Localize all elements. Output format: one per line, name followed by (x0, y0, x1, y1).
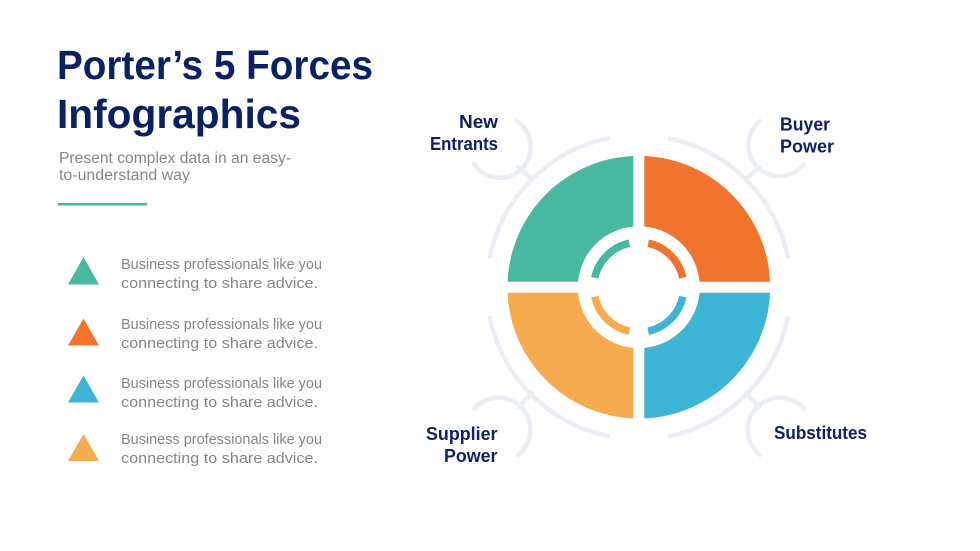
label: new entrants: Entrants (430, 133, 498, 154)
bullet 4: Business professionals like you (121, 431, 322, 448)
label: supplier power (426, 423, 498, 466)
subtitle (59, 150, 291, 184)
label: buyer power (780, 114, 834, 156)
bullet 2: Business professionals like you (121, 316, 322, 333)
title: Porter’s 5 Forces (57, 42, 373, 88)
bullet 1 (68, 256, 322, 292)
bullet 1: connecting to share advice. (121, 275, 318, 292)
title: Infographics (57, 91, 301, 137)
label: buyer power: Power (780, 136, 834, 156)
label: new entrants: New (459, 111, 499, 132)
title (57, 42, 373, 137)
subtitle: to-understand way (59, 167, 190, 184)
bullet 3: Business professionals like you (121, 375, 322, 392)
accent rule (58, 203, 147, 206)
subtitle: Present complex data in an easy- (59, 150, 291, 167)
bullet 4: connecting to share advice. (121, 450, 318, 467)
bullet 4 (68, 431, 322, 467)
segment: new entrants (508, 156, 633, 282)
label: buyer power: Buyer (780, 114, 830, 134)
bullet 3: connecting to share advice. (121, 394, 318, 411)
segment: substitutes (644, 293, 770, 418)
bullet 2 (68, 316, 322, 352)
segment: buyer power (644, 156, 770, 282)
outer ring arcs and connectors (474, 121, 804, 455)
label: supplier power: Supplier (426, 423, 498, 444)
bullet list (68, 256, 322, 467)
label: substitutes: Substitutes (774, 422, 867, 443)
donut chart (508, 156, 770, 418)
bullet 1: Business professionals like you (121, 256, 322, 273)
segment: supplier power (508, 293, 633, 418)
label: new entrants (430, 111, 499, 154)
bullet 3 (68, 375, 322, 411)
label: supplier power: Power (444, 445, 498, 466)
bullet 2: connecting to share advice. (121, 335, 318, 352)
inner ring arcs (595, 243, 683, 331)
